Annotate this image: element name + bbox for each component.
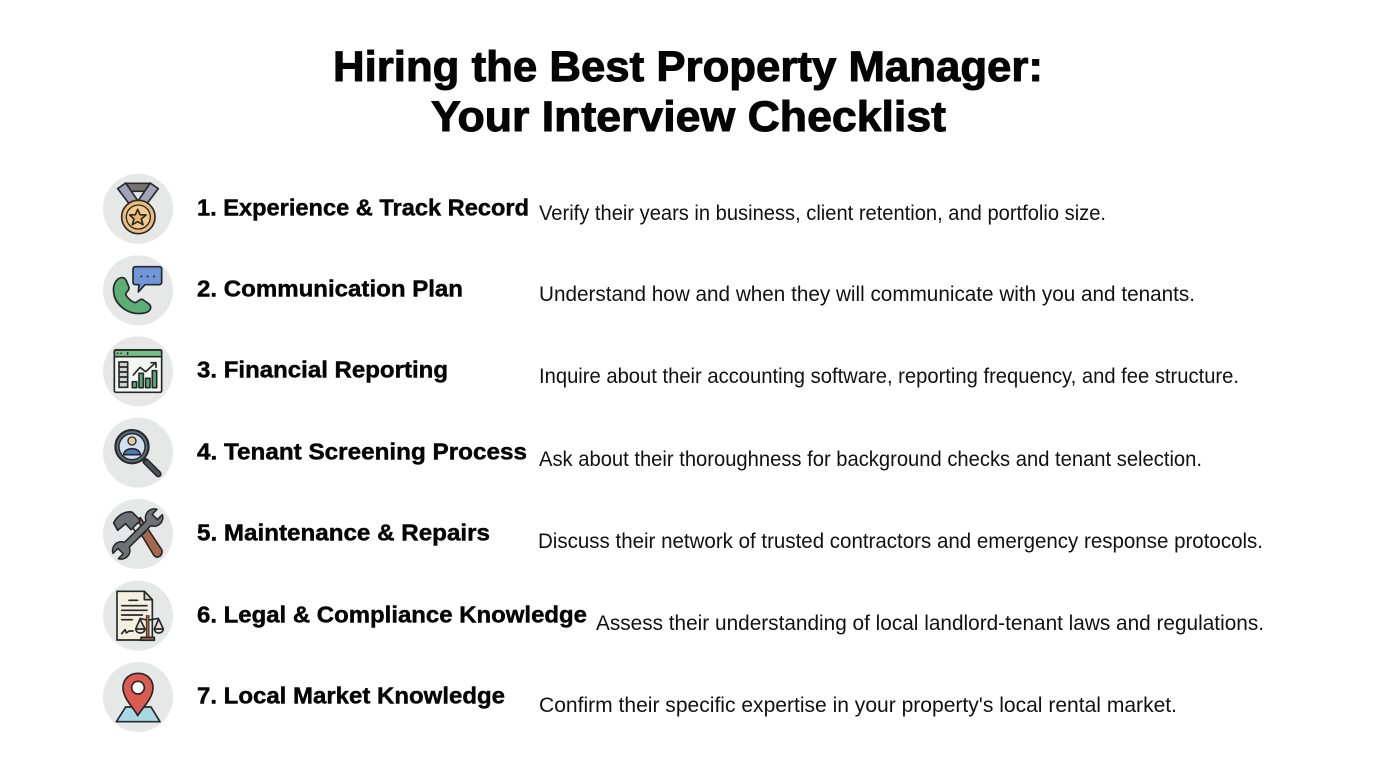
heading: 2. Communication Plan <box>197 276 463 302</box>
heading: 7. Local Market Knowledge <box>197 682 505 708</box>
icon: hammer and wrench <box>103 499 173 569</box>
description: Confirm their specific expertise in your property's local rental market. <box>539 693 1177 717</box>
description: Discuss their network of trusted contractors and emergency response protocols. <box>538 529 1263 553</box>
heading: 3. Financial Reporting <box>197 356 448 382</box>
icon: map pin <box>103 662 173 732</box>
item 1: experience and track record <box>103 174 1106 244</box>
description: Inquire about their accounting software, reporting frequency, and fee structure. <box>539 364 1239 388</box>
description: Understand how and when they will communicate with you and tenants. <box>539 282 1195 306</box>
heading: 6. Legal & Compliance Knowledge <box>197 602 587 628</box>
item 4: tenant screening process <box>103 418 1202 488</box>
heading: 1. Experience & Track Record <box>197 194 529 220</box>
heading: 4. Tenant Screening Process <box>197 438 527 464</box>
item 3: financial reporting <box>103 336 1239 406</box>
icon: document and scales <box>103 581 173 651</box>
item 2: communication plan <box>103 255 1195 325</box>
icon: magnifier with person <box>103 418 173 488</box>
description: Assess their understanding of local landlord-tenant laws and regulations. <box>596 611 1264 635</box>
description: Verify their years in business, client retention, and portfolio size. <box>539 201 1106 225</box>
title <box>333 43 1043 141</box>
item 7: local market knowledge <box>103 662 1177 732</box>
icon: medal <box>103 174 173 244</box>
icon: financial dashboard <box>103 336 173 406</box>
title: Hiring the Best Property Manager: <box>333 43 1043 91</box>
item 5: maintenance and repairs <box>103 499 1263 569</box>
item 6: legal and compliance knowledge <box>103 581 1264 651</box>
icon: phone and chat bubble <box>103 255 173 325</box>
description: Ask about their thoroughness for background checks and tenant selection. <box>539 447 1202 471</box>
title: Your Interview Checklist <box>431 93 946 141</box>
heading: 5. Maintenance & Repairs <box>197 520 490 546</box>
